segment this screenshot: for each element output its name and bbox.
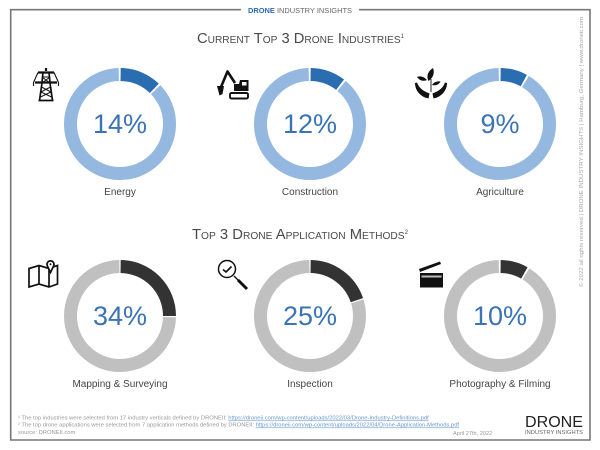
footnotes: ² The top drone applications were selected from 7 application methods defined by DRONEII: https://droneii.com/wp-content/uploads/2022/04/Drone-Application-Methods.pdf [18,422,459,428]
donut: agriculture 9%: Agriculture [476,187,524,198]
donut: photography and filming 10%: Photography & Filming [449,379,551,390]
icon: magnifying glass with check [218,260,247,289]
donut: inspection 25%: 25% [283,301,337,331]
donut: mapping and surveying 34% [70,266,170,390]
donut: construction 12% [260,74,360,198]
donut: energy 14%: Energy [104,187,136,198]
donut: inspection 25%: Inspection [287,379,333,390]
icon: power pylon [34,68,58,100]
donut: agriculture 9%: 9% [480,109,520,139]
icon: plant in hands [415,68,447,98]
title: top industries: 1 [401,34,405,40]
side copyright text: © 2022 all rights reserved | DRONE INDUSTRY INSIGHTS | Hamburg, Germany | www.droneii.com [578,17,585,287]
date: April 27th, 2022 [453,431,492,437]
donut: photography and filming 10% [449,266,551,390]
donut: energy 14% [70,74,170,198]
footnotes [18,416,459,436]
logo: INDUSTRY INSIGHTS [525,430,584,436]
icon: excavator [217,72,248,98]
title: top application methods: 2 [405,230,409,236]
title: top application methods: Top 3 Drone Application Methods [192,227,400,243]
donut: mapping and surveying 34%: 34% [93,301,147,331]
footnotes: source: DRONEII.com [18,430,76,436]
header brand: DRONE INDUSTRY INSIGHTS [248,6,352,15]
donut: construction 12%: 12% [283,109,337,139]
donut: construction 12%: Construction [282,187,338,198]
icon: clapperboard [419,262,443,288]
donut: energy 14%: 14% [93,109,147,139]
footnotes: ¹ The top industries were selected from 17 industry verticals defined by DRONEII: https://droneii.com/wp-content/uploads/2022/03/Drone-Industry-Definitions.pdf [18,416,429,422]
donut: inspection 25% [260,266,360,390]
icon: folded map with pin [29,261,58,287]
donut: mapping and surveying 34%: Mapping & Surveying [72,379,168,390]
donut: agriculture 9% [450,74,550,198]
title: top industries: Current Top 3 Drone Industries [197,31,398,47]
donut: photography and filming 10%: 10% [473,301,527,331]
logo: DRONE [525,414,583,431]
